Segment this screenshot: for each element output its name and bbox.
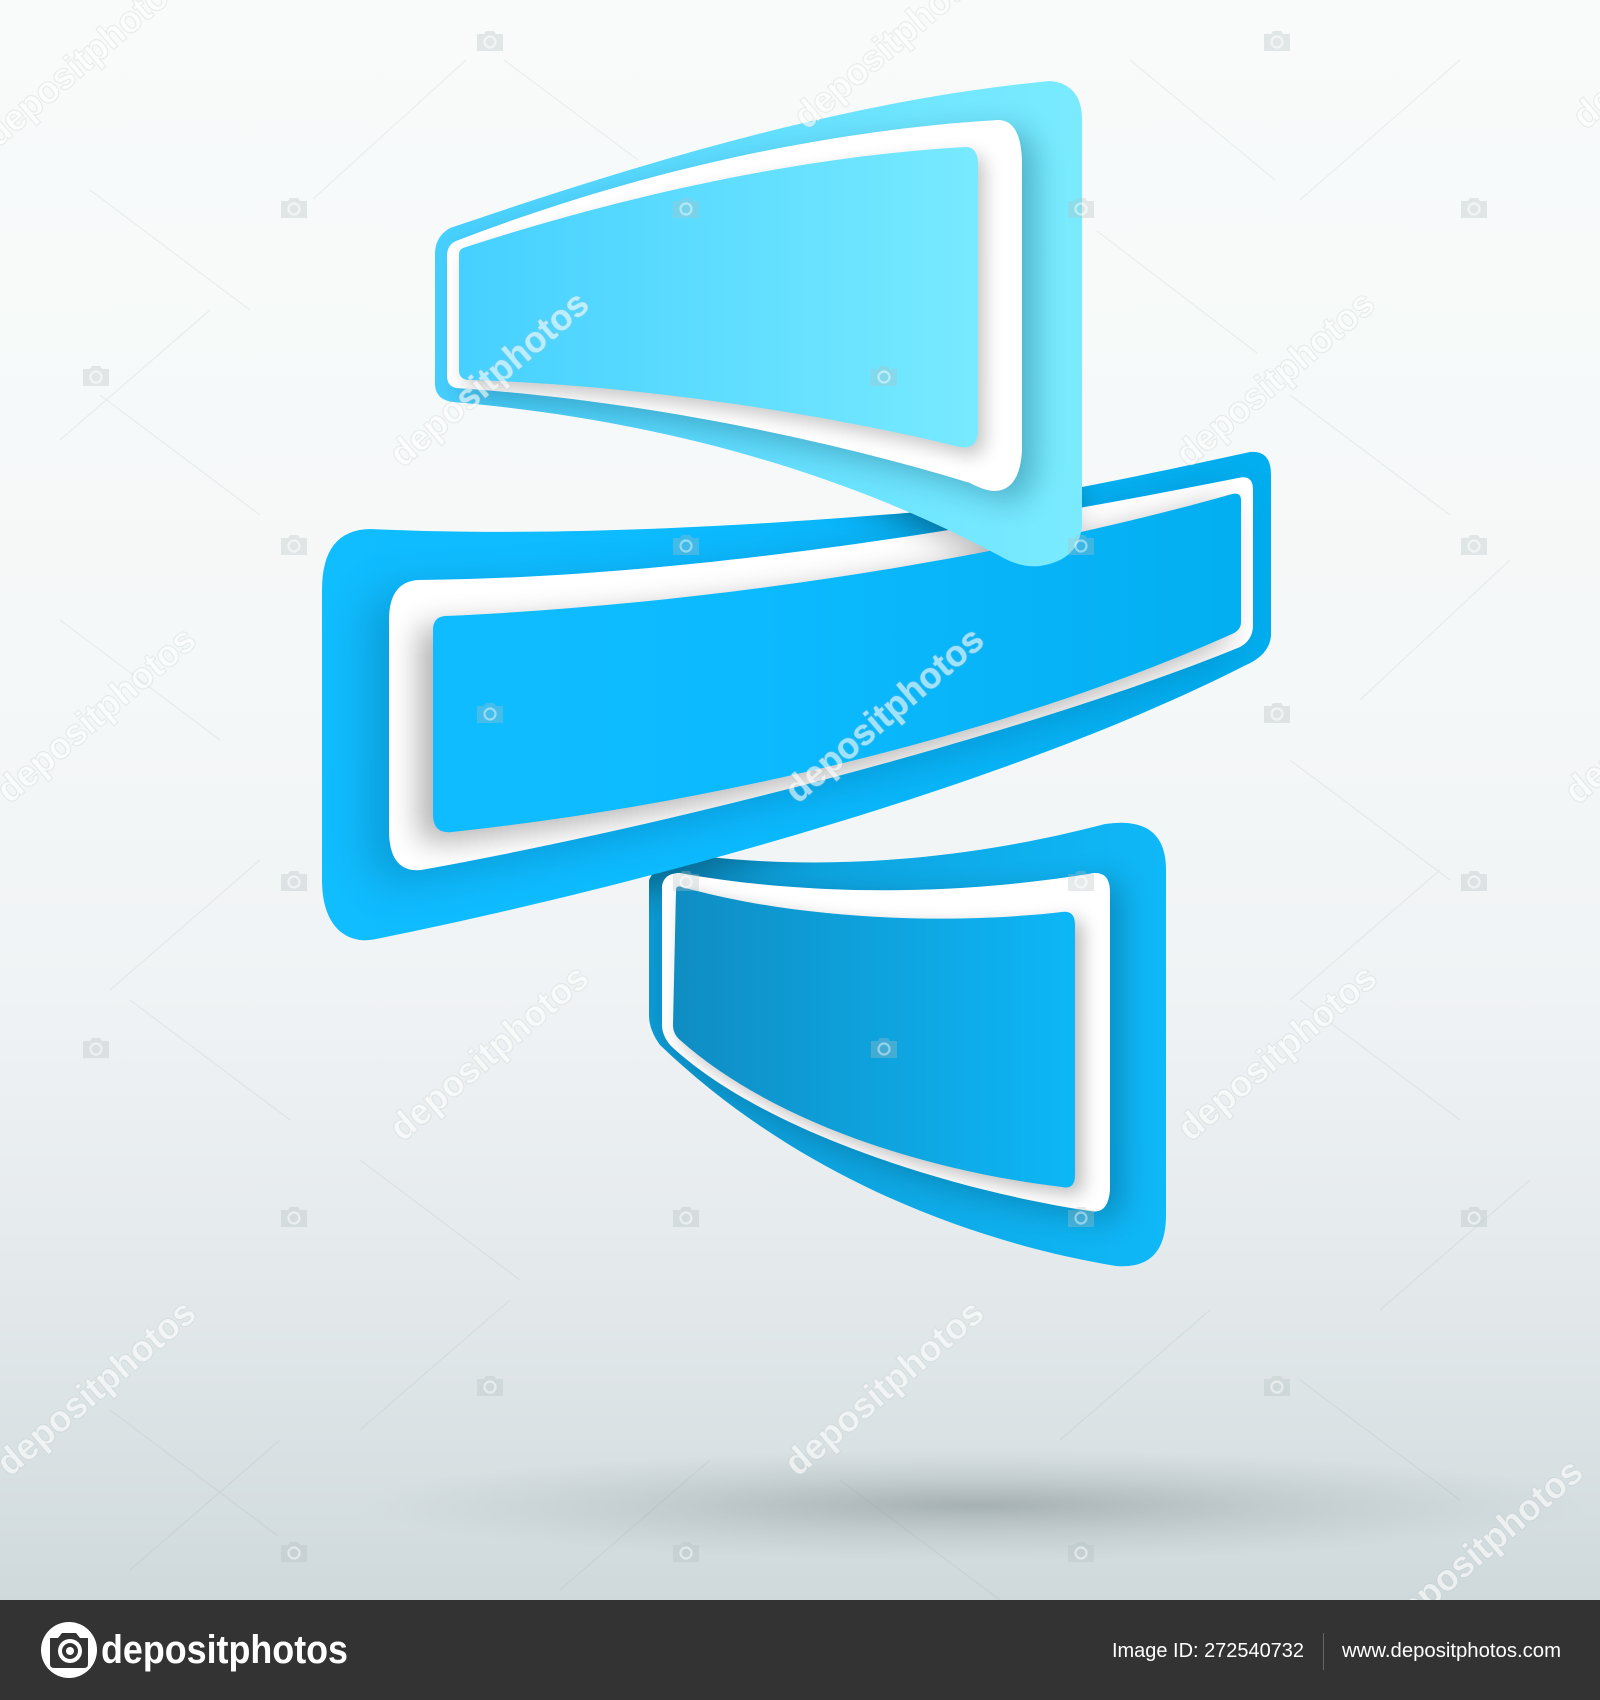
banner: top ribbon (435, 81, 1082, 566)
white frame: top ribbon (447, 120, 1022, 491)
watermark text: depositphotos (1169, 956, 1384, 1149)
inner shadow: top ribbon (466, 155, 985, 455)
watermark camera icons (83, 31, 1487, 1562)
image id: Image ID: 272540732 (1112, 1640, 1304, 1662)
watermark text: depositphotos (776, 618, 991, 811)
watermark text: depositphotos (1375, 1450, 1590, 1643)
content panel: middle ribbon (433, 494, 1241, 832)
watermark text: depositphotos (1167, 282, 1382, 475)
floor shadow (355, 1449, 1595, 1561)
content panel: bottom ribbon (673, 886, 1075, 1188)
banner: bottom ribbon (649, 822, 1166, 1266)
content panel: top ribbon (459, 147, 978, 447)
logo wordmark: depositphotos (101, 1628, 348, 1672)
shadow under white frame: top ribbon (461, 130, 1036, 501)
website url: www.depositphotos.com (1341, 1640, 1561, 1662)
shadow under white frame: middle ribbon (352, 478, 1244, 896)
icon: depositphotos camera logo (41, 1622, 97, 1678)
inner shadow: middle ribbon (402, 491, 1244, 858)
divider (1323, 1633, 1324, 1670)
white frame: bottom ribbon (662, 873, 1110, 1212)
watermark text: depositphotos (381, 956, 596, 1149)
watermark text: depositphotos (776, 1291, 991, 1484)
banner: middle ribbon (322, 452, 1271, 940)
white frame: middle ribbon (389, 477, 1253, 870)
shadow cast on bottom ribbon (649, 858, 1137, 1232)
watermark text: depositphotos (381, 282, 596, 475)
inner shadow: bottom ribbon (681, 893, 1083, 1194)
footer bar (0, 1600, 1600, 1700)
